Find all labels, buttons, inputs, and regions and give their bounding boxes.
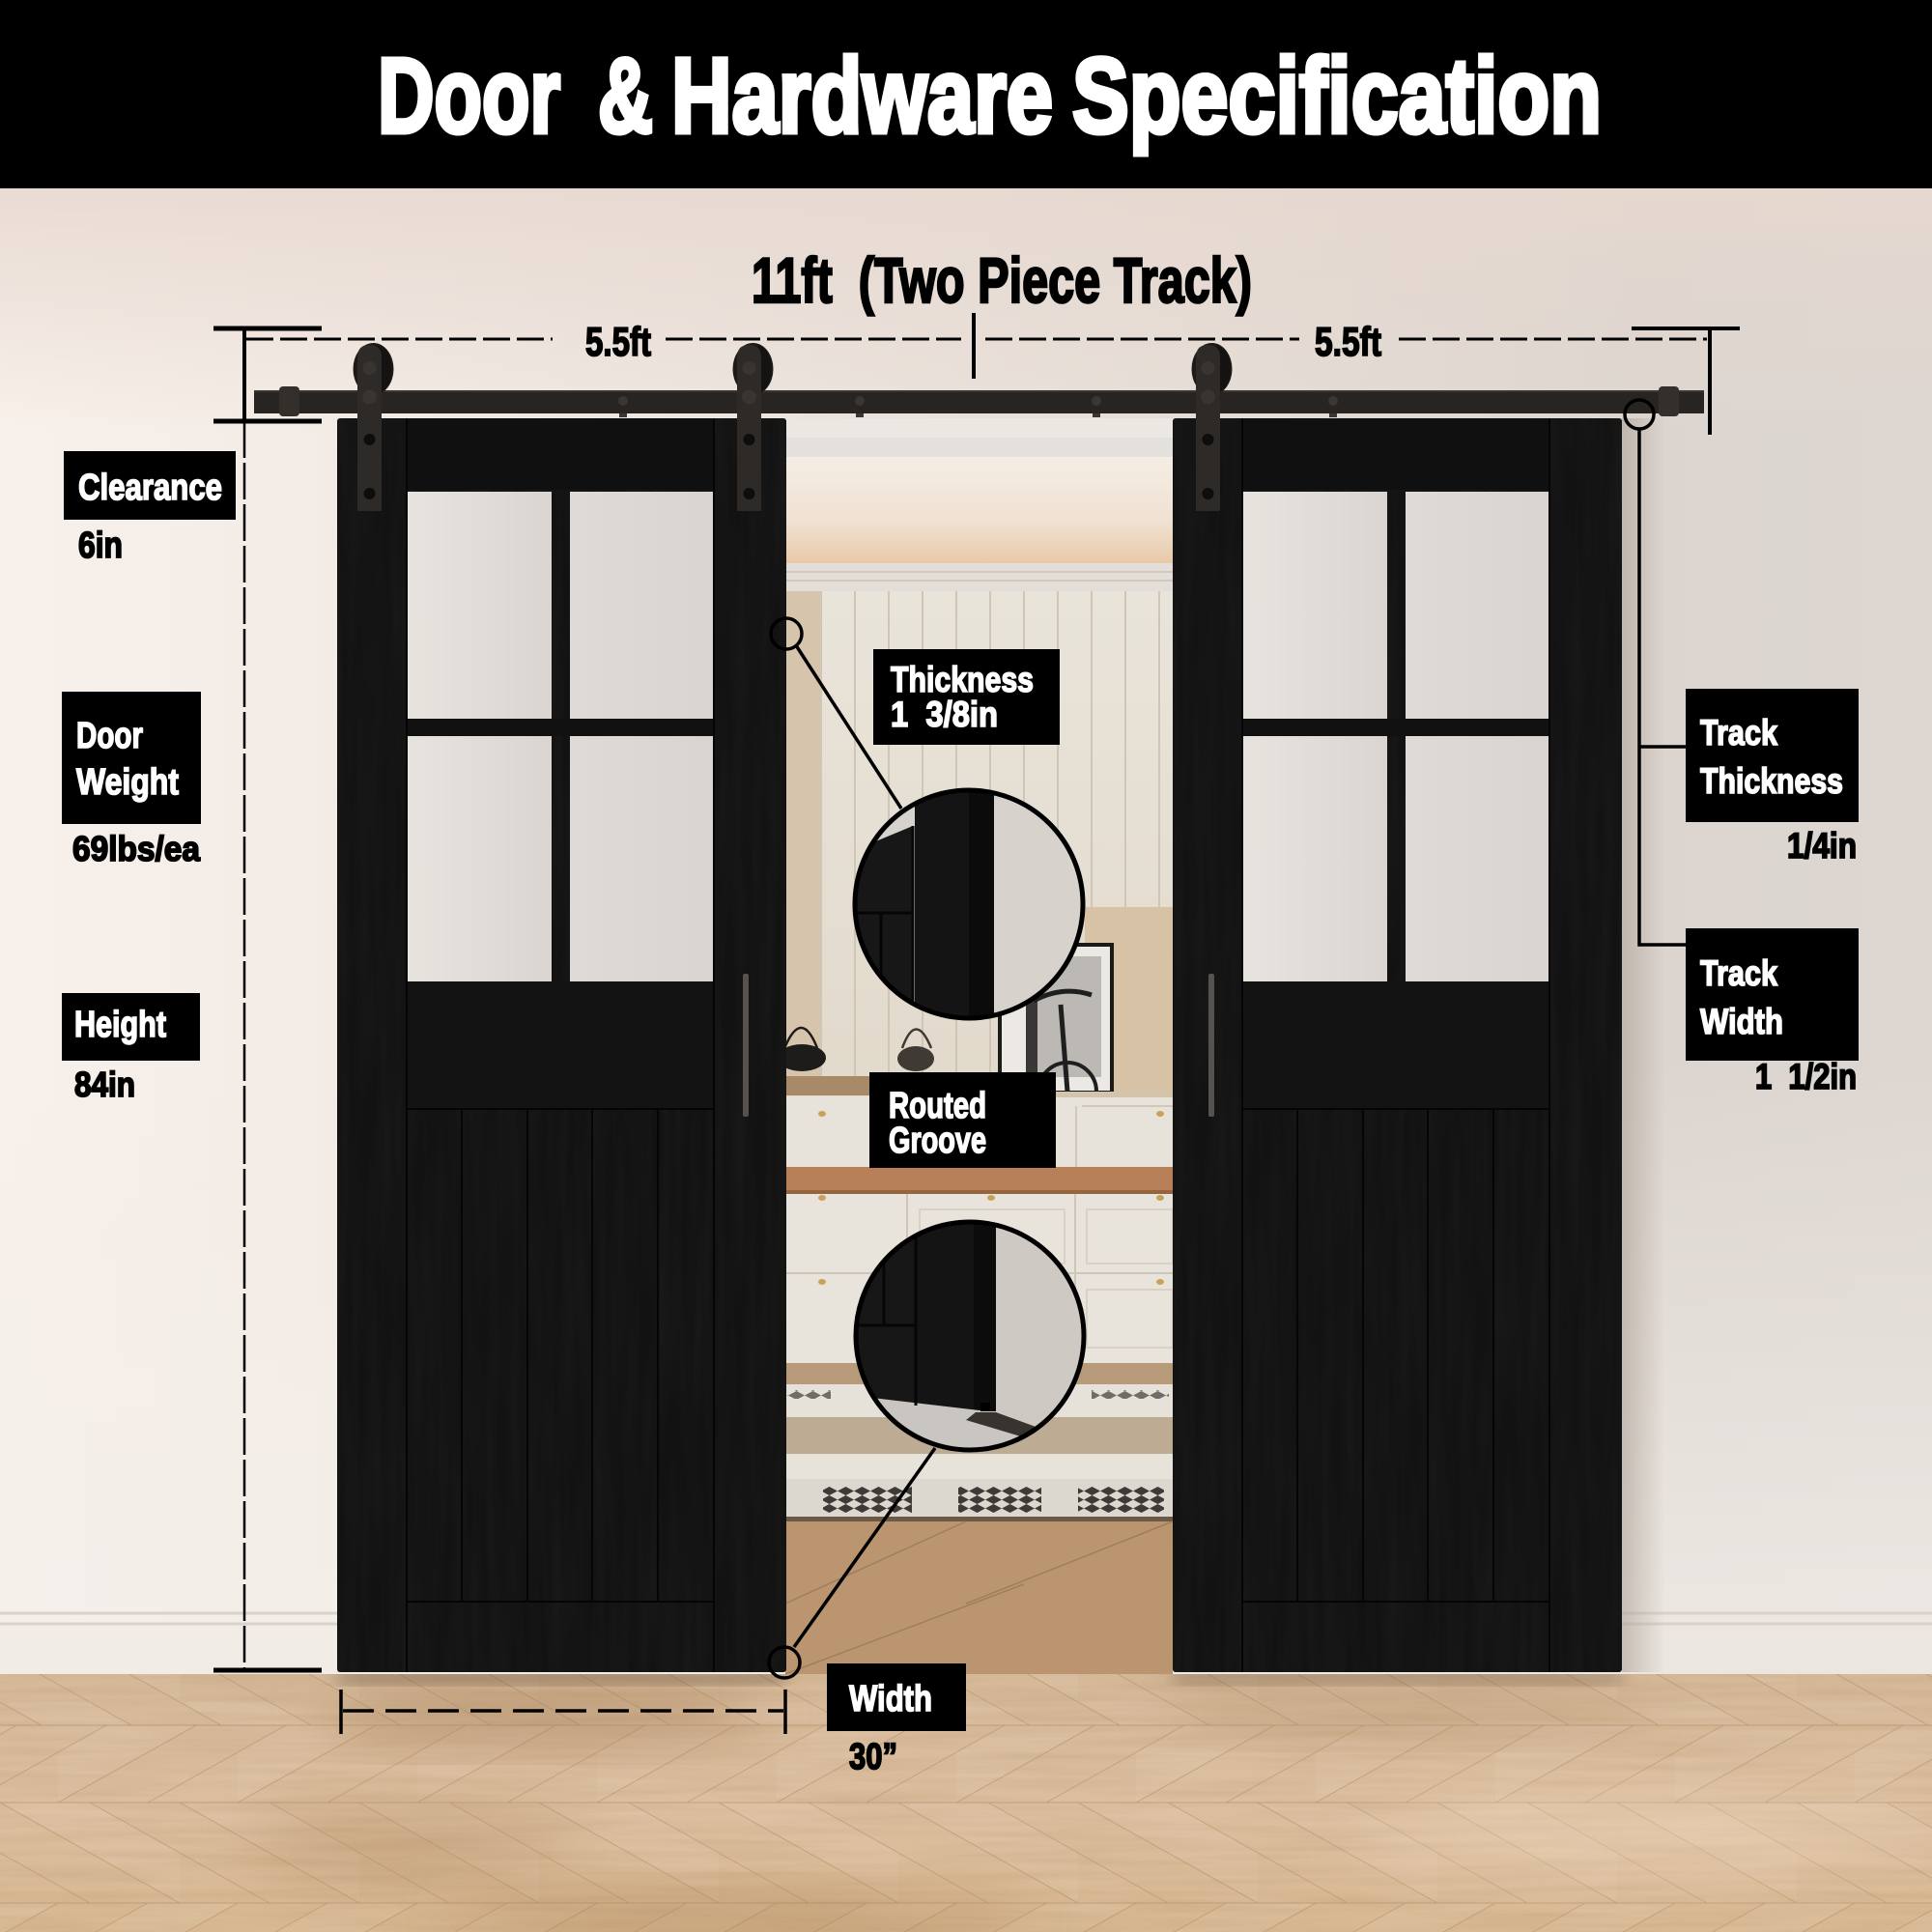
sliding track [254,386,1704,417]
track width label: Width [1700,1002,1783,1041]
track thickness label [1686,689,1859,866]
width label: 30” [849,1737,897,1777]
track width label: 1 1/2in [1755,1057,1857,1096]
title [378,37,1602,156]
hanger 3 [1192,343,1233,511]
interior scene through opening [785,418,1173,1674]
right barn door [1173,418,1622,1672]
half track label left: 5.5ft [585,319,651,364]
wall background [0,188,1932,1676]
track thickness label: 1/4in [1787,826,1857,866]
door weight label: 69lbs/ea [72,829,201,868]
track width label: Track [1700,953,1777,993]
header bar [0,0,1932,188]
routed groove label: Groove [889,1121,986,1161]
height label [62,993,200,1104]
left barn door [337,418,786,1672]
width callout leader [769,1448,935,1678]
title: Hardware [671,37,1053,156]
rug and interior floor [785,1363,1173,1674]
track thickness label: Track [1700,713,1777,753]
track width label [1686,928,1859,1096]
kitchen cabinets and counter [785,1092,1173,1363]
routed groove label: Routed [889,1086,986,1126]
track thickness label: Thickness [1700,761,1843,801]
height label: 84in [74,1065,135,1104]
height dimension line [213,421,322,1670]
title: Specification [1072,37,1602,156]
door weight label [62,692,201,868]
kettles and countertop items [778,1028,934,1095]
thickness callout: Thickness [891,660,1034,699]
door weight label: Weight [76,762,179,803]
routed groove label [869,1072,1056,1168]
wood floor [0,1672,1932,1932]
track length heading: 11ft (Two Piece Track) [752,244,1252,316]
width label: Width [849,1679,932,1719]
thickness callout [771,618,1060,809]
height label: Height [74,1005,166,1045]
width dimension line [341,1690,785,1734]
detail lens: door thickness [855,790,1083,1018]
track spec leader [1625,400,1686,945]
door weight label: Door [76,716,143,756]
title: & [598,37,653,156]
clearance label: Clearance [78,468,222,508]
thickness callout: 1 3/8in [891,695,998,734]
clearance label: 6in [78,526,123,566]
hanger 2 [732,343,773,511]
clearance label [64,451,236,566]
door handles [743,974,1214,1117]
detail lens: routed groove [856,1222,1084,1450]
framed bicycle picture [998,943,1114,1094]
half track label right: 5.5ft [1315,319,1381,364]
track dimension lines [213,313,1740,435]
hanger 1 [354,343,394,511]
width label [827,1663,966,1777]
title: Door [378,37,560,156]
